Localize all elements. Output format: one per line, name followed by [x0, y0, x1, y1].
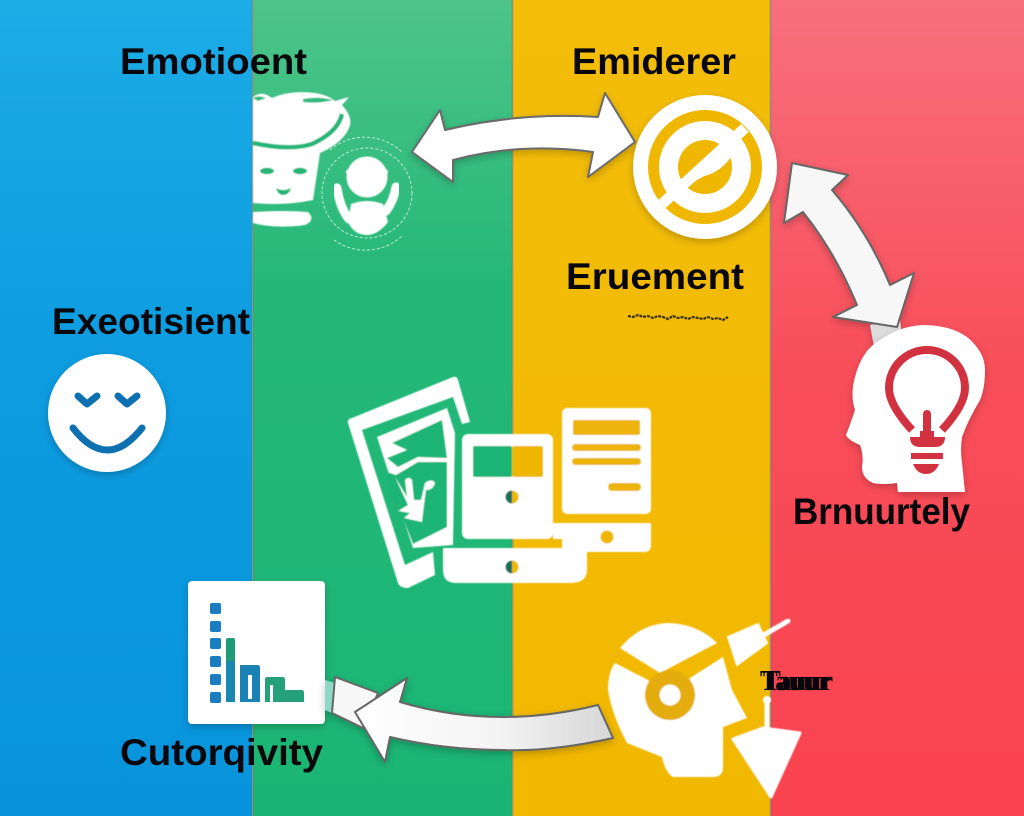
- icon: small tool: [728, 621, 788, 665]
- arrow: double arrow between green and yellow: [412, 93, 635, 182]
- heading: Cutorqivity: Cutorqivity: [120, 732, 323, 773]
- arrow: double arrow between target and head: [784, 163, 914, 352]
- arrow: curved arrow to chart: [325, 677, 613, 762]
- icon: smiley face: [48, 354, 166, 472]
- icon: down arrow: [733, 696, 800, 797]
- icon: desktop devices: [443, 408, 651, 583]
- heading: Emiderer: Emiderer: [572, 41, 736, 82]
- icon: tablet with sketch: [348, 377, 470, 588]
- panel: red column: [771, 0, 1024, 816]
- icon: face in pot: [253, 92, 350, 227]
- heading: Emotioent: Emotioent: [120, 41, 307, 82]
- panel: green column: [253, 0, 512, 816]
- icon: head with lightbulb: [846, 325, 985, 492]
- panel: yellow column: [513, 0, 770, 816]
- heading: Exeotisient: Exeotisient: [52, 301, 250, 342]
- icon: bar chart card: [188, 581, 325, 724]
- label: Tauur: Tauur: [760, 665, 830, 697]
- panel: blue column: [0, 0, 252, 816]
- heading: Brnuurtely: Brnuurtely: [793, 491, 970, 532]
- heading: Eruement: Eruement: [566, 256, 744, 297]
- label: Tauur: Tauur: [763, 665, 833, 697]
- squiggle caption line: [628, 315, 728, 320]
- icon: person in dashed circle: [322, 137, 412, 250]
- icon: head with gear node: [608, 623, 747, 777]
- icon: target circle: [633, 95, 777, 239]
